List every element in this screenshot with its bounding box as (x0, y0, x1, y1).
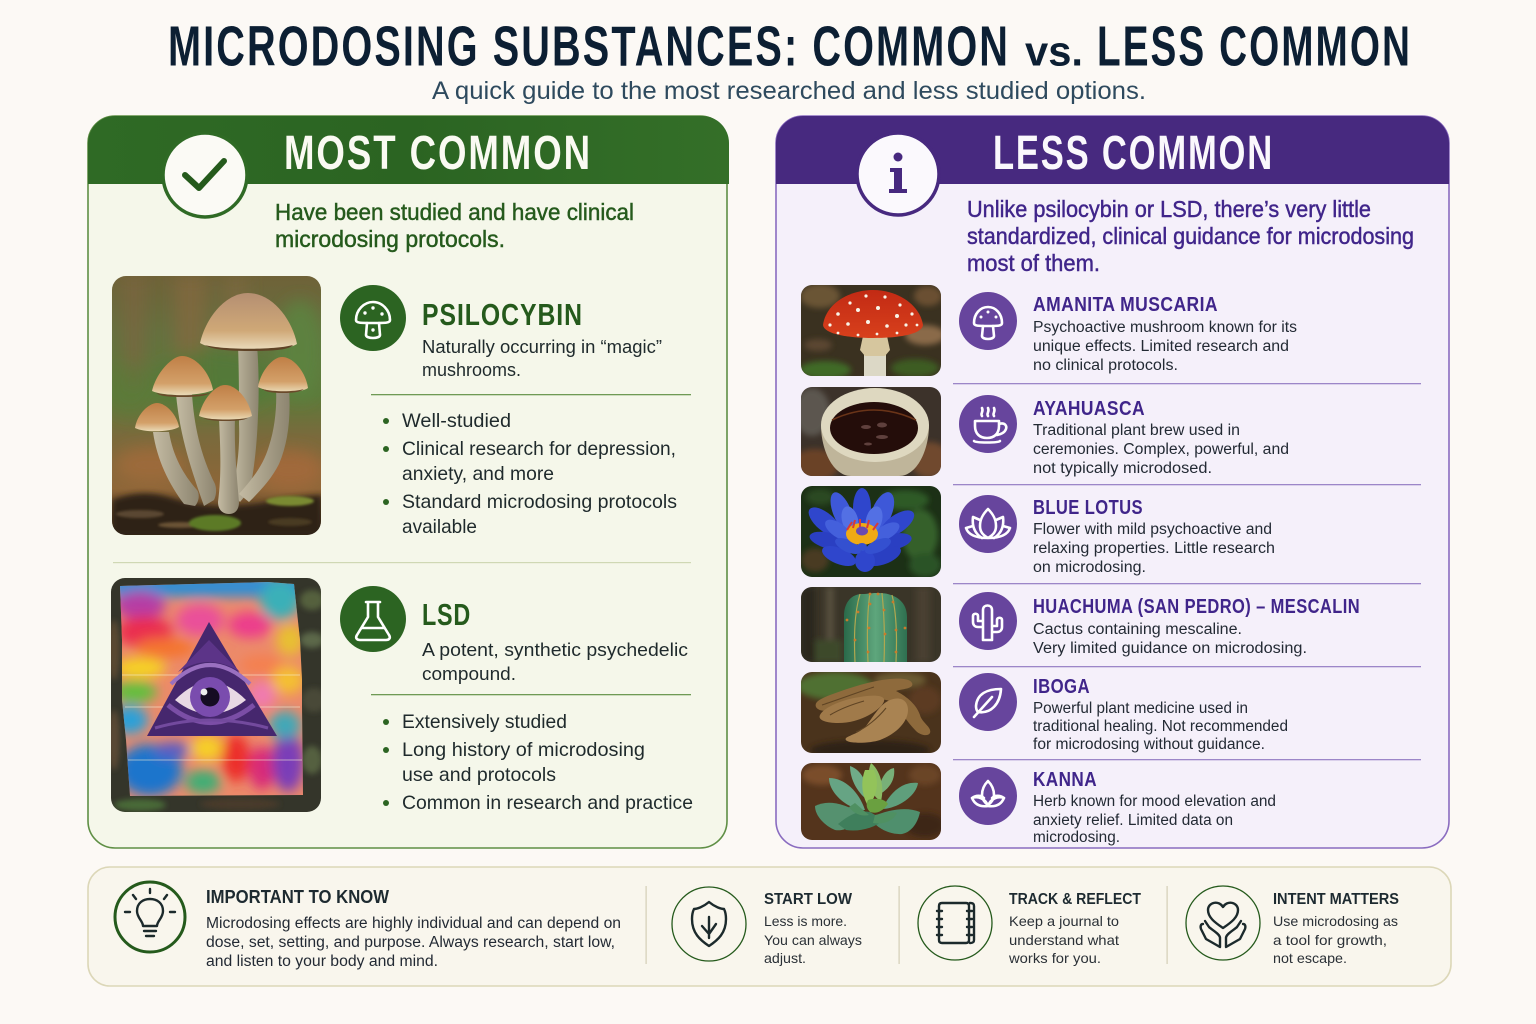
row: kanna (801, 763, 1276, 846)
intent matters text: INTENT MATTERS (1273, 891, 1399, 908)
icon: heart in hands (1186, 886, 1260, 960)
panel: most common (88, 116, 729, 848)
panel background (88, 116, 727, 848)
psilocybin description: mushrooms. (422, 359, 521, 380)
track and reflect text (1008, 891, 1141, 966)
psilocybin bullet list: anxiety, and more (402, 463, 554, 485)
row: ayahuasca (791, 387, 1289, 481)
image: amanita mushroom (799, 284, 945, 379)
icon: lotus (959, 495, 1017, 553)
kanna name: KANNA (1033, 769, 1097, 791)
icon: mushroom (959, 292, 1017, 350)
image: san pedro cactus (801, 587, 941, 662)
LSD name: LSD (422, 597, 471, 632)
psilocybin bullet list: Standard microdosing protocols (402, 491, 677, 513)
blue lotus description: Flower with mild psychoactive and (1033, 521, 1272, 538)
ayahuasca description: Traditional plant brew used in (1033, 422, 1240, 439)
huachuma description (1033, 621, 1307, 657)
panel heading: MOST COMMON (284, 127, 592, 180)
blue lotus description (1033, 521, 1275, 576)
ayahuasca description (1033, 422, 1289, 477)
intent matters text (1273, 891, 1399, 966)
important to know text: Microdosing effects are highly individual and can depend on (206, 915, 621, 932)
panel: less common (776, 116, 1449, 848)
image: psilocybin mushrooms (106, 276, 325, 536)
image: ayahuasca bowl (801, 387, 941, 476)
LSD bullet list (383, 711, 693, 814)
psilocybin bullet list: Clinical research for depression, (402, 438, 676, 460)
icon: teacup (959, 395, 1017, 453)
image: LSD blotter art (108, 575, 326, 812)
ayahuasca name: AYAHUASCA (1033, 398, 1145, 420)
panel header band (88, 116, 729, 184)
intent matters text: a tool for growth, (1273, 932, 1387, 948)
kanna description: Herb known for mood elevation and (1033, 793, 1276, 810)
icon: LSD flask (340, 586, 406, 652)
LSD bullet list: Extensively studied (402, 711, 567, 733)
blue lotus name: BLUE LOTUS (1033, 497, 1143, 519)
intent matters text: Use microdosing as (1273, 913, 1398, 929)
panel intro text: standardized, clinical guidance for microdosing (967, 223, 1414, 249)
psilocybin description (422, 336, 662, 380)
panel intro text (275, 199, 634, 252)
track and reflect text: Keep a journal to (1009, 913, 1119, 929)
important to know text: and listen to your body and mind. (206, 953, 438, 970)
LSD bullet list: Long history of microdosing (402, 739, 645, 761)
important to know text: IMPORTANT TO KNOW (206, 887, 389, 907)
row: amanita muscaria (799, 284, 1297, 379)
psilocybin bullet list: Well-studied (402, 410, 511, 432)
ayahuasca description: ceremonies. Complex, powerful, and (1033, 441, 1289, 458)
intent matters text: not escape. (1273, 950, 1347, 966)
huachuma description: Cactus containing mescaline. (1033, 621, 1242, 638)
title: MICRODOSING SUBSTANCES: COMMON (168, 14, 1010, 78)
icon: info badge (857, 133, 939, 215)
panel intro text: Unlike psilocybin or LSD, there’s very little (967, 196, 1371, 222)
icon: check mark badge (163, 133, 247, 217)
huachuma description: Very limited guidance on microdosing. (1033, 640, 1307, 657)
amanita description: Psychoactive mushroom known for its (1033, 319, 1297, 336)
iboga name: IBOGA (1033, 676, 1090, 698)
icon: psilocybin mushroom (340, 285, 406, 351)
track and reflect text: understand what (1009, 932, 1119, 948)
panel: tips footer (88, 867, 1451, 986)
amanita description (1033, 319, 1297, 374)
important to know text: dose, set, setting, and purpose. Always research, start low, (206, 934, 615, 951)
ayahuasca description: not typically microdosed. (1033, 460, 1212, 477)
LSD description (422, 639, 688, 684)
start low text (764, 891, 862, 966)
start low text: adjust. (764, 950, 806, 966)
start low text: You can always (764, 932, 862, 948)
row: blue lotus (801, 486, 1275, 577)
panel intro text: Have been studied and have clinical (275, 199, 634, 225)
blue lotus description: relaxing properties. Little research (1033, 540, 1275, 557)
icon: cactus (959, 592, 1017, 650)
psilocybin bullet list (383, 410, 677, 538)
amanita name: AMANITA MUSCARIA (1033, 294, 1218, 316)
panel intro text: most of them. (967, 250, 1100, 276)
kanna description: anxiety relief. Limited data on (1033, 812, 1233, 829)
row: iboga (797, 672, 1288, 760)
panel intro text (967, 196, 1414, 276)
iboga description: traditional healing. Not recommended (1033, 718, 1288, 735)
psilocybin bullet list: available (402, 516, 477, 538)
icon: journal (918, 886, 992, 960)
blue lotus description: on microdosing. (1033, 559, 1146, 576)
stems (236, 350, 259, 502)
amanita description: unique effects. Limited research and (1033, 338, 1289, 355)
image: kanna succulent (801, 763, 945, 840)
psilocybin name: PSILOCYBIN (422, 297, 583, 332)
iboga description: Powerful plant medicine used in (1033, 700, 1248, 717)
iboga description (1033, 700, 1288, 753)
amanita description: no clinical protocols. (1033, 357, 1178, 374)
footer background (88, 867, 1451, 986)
title: vs. (1025, 28, 1083, 74)
kanna description (1033, 793, 1276, 846)
icon: sprout in hand (959, 767, 1017, 825)
huachuma name: HUACHUMA (SAN PEDRO) – MESCALIN (1033, 596, 1360, 618)
panel heading: LESS COMMON (993, 127, 1274, 180)
panel header band (776, 116, 1449, 184)
triangle and eye (147, 622, 277, 736)
panel background (776, 116, 1449, 848)
subtitle: A quick guide to the most researched and less studied options. (432, 77, 1146, 105)
image: blue lotus flower (801, 486, 941, 577)
image: iboga roots (801, 672, 941, 753)
LSD description: A potent, synthetic psychedelic (422, 639, 688, 660)
important to know text (206, 887, 621, 970)
LSD bullet list: use and protocols (402, 764, 556, 786)
start low text: Less is more. (764, 913, 847, 929)
track and reflect text: works for you. (1008, 950, 1101, 966)
LSD bullet list: Common in research and practice (402, 792, 693, 814)
start low text: START LOW (764, 891, 853, 908)
LSD description: compound. (422, 663, 516, 684)
icon: light bulb (115, 882, 185, 952)
panel intro text: microdosing protocols. (275, 226, 505, 252)
caps (200, 293, 297, 351)
row: huachuma (801, 587, 1360, 662)
icon: leaf (959, 673, 1017, 731)
iboga description: for microdosing without guidance. (1033, 736, 1265, 753)
track and reflect text: TRACK & REFLECT (1009, 891, 1141, 908)
icon: shield (672, 887, 746, 961)
kanna description: microdosing. (1033, 829, 1120, 846)
psilocybin description: Naturally occurring in “magic” (422, 336, 662, 357)
